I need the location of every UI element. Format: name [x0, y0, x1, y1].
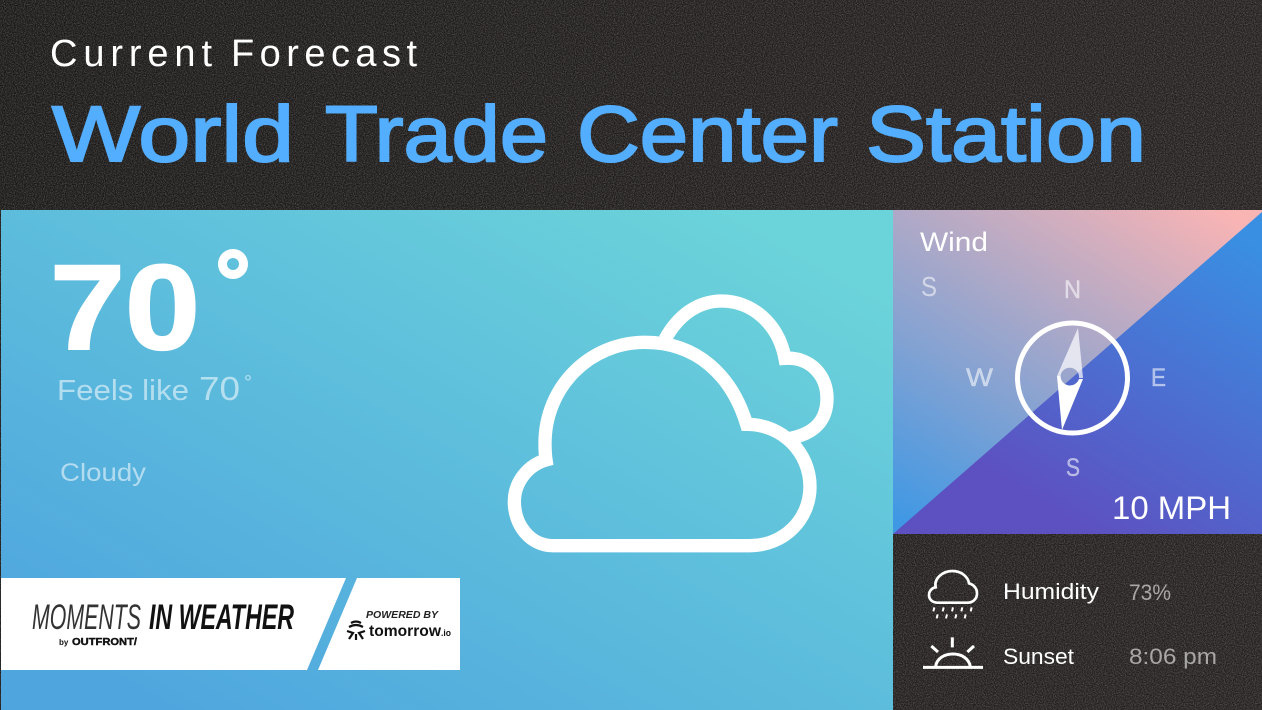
compass letters: S [1066, 454, 1080, 482]
compass letters: W [966, 364, 993, 392]
temperature [50, 239, 244, 375]
heading: Current Forecast: Forecast [231, 33, 417, 75]
logo text: Moments in Weather: MOMENTS [32, 598, 141, 637]
logo banner [1, 578, 460, 670]
sunset value: 8:06 pm [1129, 644, 1217, 669]
feels like text [57, 370, 252, 407]
panel: current conditions [1, 210, 893, 710]
icon: compass [1018, 323, 1128, 433]
heading: Current Forecast [50, 33, 417, 75]
wind label: Wind [920, 227, 988, 257]
heading: Current Forecast: Current [50, 33, 212, 75]
humidity label: Humidity [1003, 579, 1099, 604]
icon: tomorrow.io mark [347, 622, 365, 640]
title: World Trade Center Station: World [52, 89, 294, 178]
feels like text: 70 [199, 370, 240, 407]
panel: humidity and sunset [923, 571, 1217, 669]
logo text: Moments in Weather: IN WEATHER [149, 598, 294, 637]
logo text: powered by: POWERED BY [366, 610, 439, 621]
humidity value: 73% [1129, 580, 1171, 605]
icon: rain cloud [929, 571, 977, 618]
title: World Trade Center Station: Center [577, 89, 838, 178]
compass letters: E [1151, 364, 1166, 392]
sunset label: Sunset [1003, 644, 1074, 669]
feels like text: ° [244, 372, 252, 394]
compass letters [966, 276, 1166, 482]
condition text: Cloudy: Cloudy [60, 459, 147, 487]
title: World Trade Center Station: Station [866, 89, 1146, 178]
compass letters: N [1064, 276, 1081, 304]
title: World Trade Center Station [52, 89, 1146, 178]
logo text: by Outfront: OUTFRONT/ [72, 637, 137, 648]
logo text: tomorrow.io: .io [441, 628, 451, 638]
icon: sunset [923, 637, 983, 667]
title: World Trade Center Station: Trade [325, 89, 548, 178]
icon: cloud [514, 301, 827, 546]
logo text: Moments in Weather [32, 598, 294, 637]
panel: wind [893, 210, 1262, 534]
feels like text: Feels like [57, 375, 189, 407]
logo text: by Outfront: by [59, 638, 69, 647]
wind speed: 10 MPH [1112, 490, 1231, 526]
wind direction value: S [921, 271, 937, 302]
logo text: tomorrow.io: tomorrow [369, 623, 442, 640]
temperature: 70 [50, 239, 200, 375]
